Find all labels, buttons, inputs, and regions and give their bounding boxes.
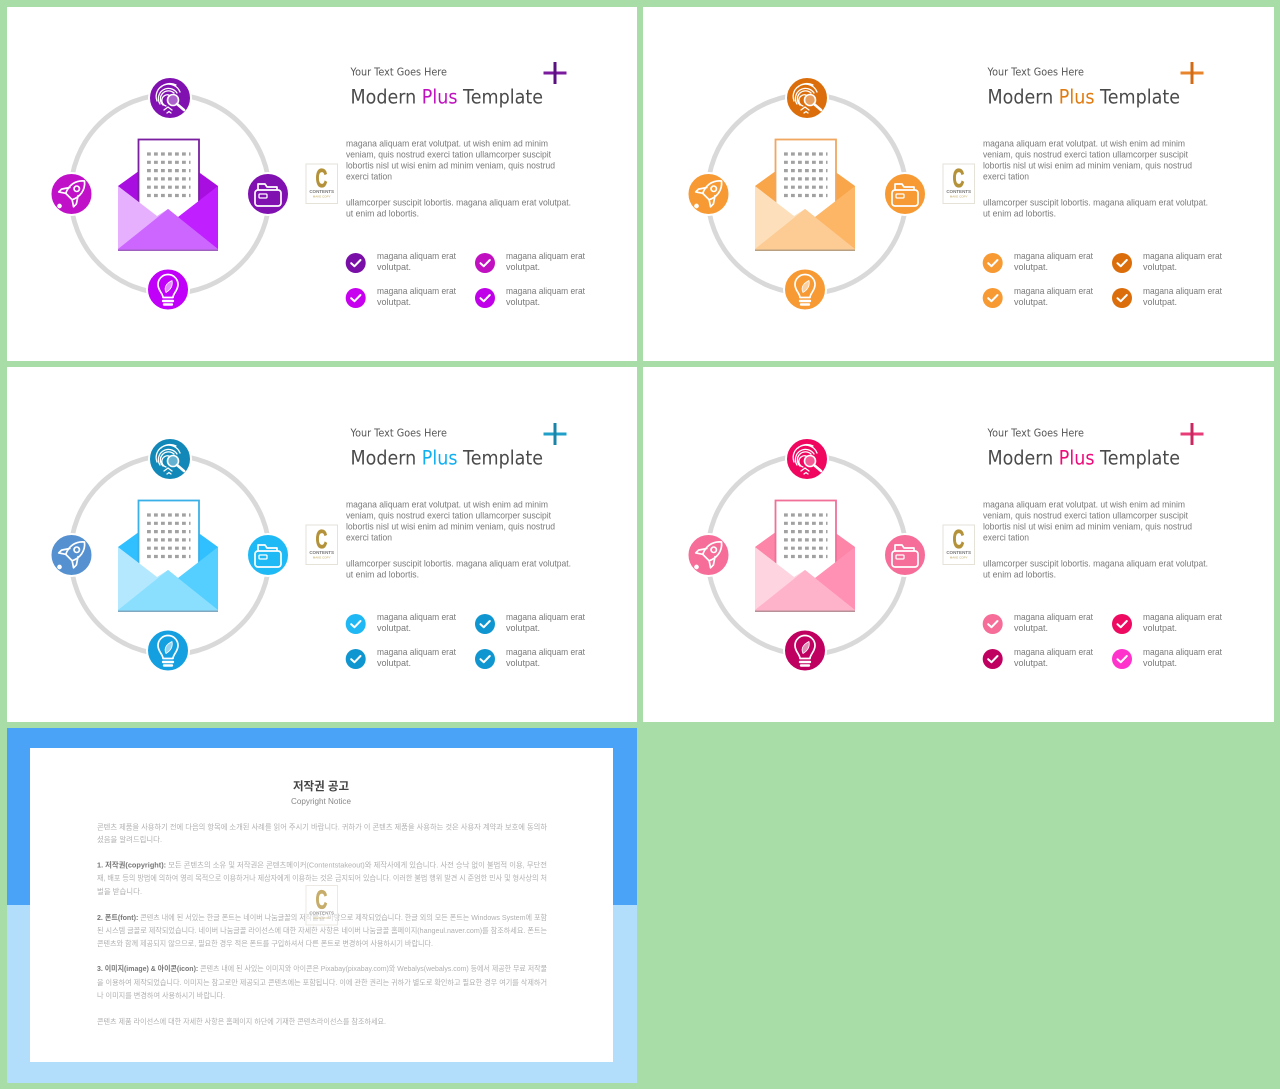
checklist: volutpat. (506, 623, 540, 633)
checklist: magana aliquam erat (1014, 612, 1093, 622)
checklist: magana aliquam erat (377, 286, 456, 296)
checklist: magana aliquam erat (377, 647, 456, 657)
heading: Your Text Goes Here (350, 428, 447, 440)
body text: ut enim ad lobortis. (983, 569, 1056, 579)
icon: rocket (50, 173, 92, 215)
logo stamp: CONTENTS (309, 189, 334, 194)
checklist: magana aliquam erat (506, 251, 585, 261)
logo stamp: MAKE COPY (950, 556, 968, 560)
diagram: ring with icons (688, 77, 926, 310)
body text: veniam, quis nostrud exerci tation ullamcorper suscipit (983, 510, 1188, 520)
checklist (346, 612, 585, 669)
logo stamp: MAKE COPY (950, 194, 968, 198)
notice section 2: 콘텐츠와 함께 제공되지 않으므로, 필요한 경우 적은 폰트를 구입하셔서 다른 폰트로 변경하여 사용하시기 바랍니다. (97, 939, 433, 948)
body text: magana aliquam erat volutpat. ut wish enim ad minim (346, 499, 548, 509)
checklist: magana aliquam erat (377, 612, 456, 622)
checklist: magana aliquam erat (506, 286, 585, 296)
notice title: Copyright Notice (291, 797, 352, 806)
checklist (983, 612, 1222, 669)
icon: envelope (118, 140, 218, 251)
checklist: magana aliquam erat (1014, 251, 1093, 261)
checklist: volutpat. (377, 297, 411, 307)
checklist: volutpat. (506, 297, 540, 307)
logo stamp: C (316, 884, 328, 915)
heading: Modern Plus Template (988, 86, 1180, 108)
body text: exerci tation (983, 171, 1029, 181)
logo stamp: CONTENTS (946, 550, 971, 555)
logo stamp (306, 884, 338, 925)
checklist: magana aliquam erat (1143, 647, 1222, 657)
heading: Your Text Goes Here (987, 428, 1084, 440)
body text (983, 499, 1208, 579)
logo stamp: CONTENTS (309, 550, 334, 555)
body text: ullamcorper suscipit lobortis. magana aliquam erat volutpat. (983, 558, 1208, 568)
body text: ut enim ad lobortis. (983, 208, 1056, 218)
notice intro: 셨음을 알려드립니다. (97, 835, 162, 844)
body text: exerci tation (983, 532, 1029, 542)
logo stamp (306, 524, 338, 564)
body text: ut enim ad lobortis. (346, 569, 419, 579)
logo stamp (306, 163, 338, 204)
body text: ullamcorper suscipit lobortis. magana aliquam erat volutpat. (346, 558, 571, 568)
checklist: volutpat. (506, 262, 540, 272)
checklist: volutpat. (377, 658, 411, 668)
heading: Your Text Goes Here (987, 66, 1084, 78)
notice title (291, 779, 352, 806)
checklist: volutpat. (506, 658, 540, 668)
heading (350, 428, 543, 470)
checklist: magana aliquam erat (1014, 647, 1093, 657)
checklist: magana aliquam erat (1014, 286, 1093, 296)
body text: exerci tation (346, 532, 392, 542)
body text: lobortis nisl ut wisi enim ad minim veniam, quis nostrud (983, 160, 1192, 170)
notice closing line: 콘텐츠 제품 라이선스에 대한 자세한 사항은 홈페이지 하단에 기재한 콘텐츠라이선스를 참조하세요. (97, 1017, 386, 1026)
checklist: volutpat. (1143, 297, 1177, 307)
body text: lobortis nisl ut wisi enim ad minim veniam, quis nostrud (346, 521, 555, 531)
notice section 1: 1. 저작권(copyright): 모든 콘텐츠의 소유 및 저작권은 콘텐츠메이커(Contentstakeout)와 제작사에게 있습니다. 사전 승낙 없이 불법적 이용, 무단전 (97, 860, 547, 870)
body text: magana aliquam erat volutpat. ut wish enim ad minim (983, 138, 1185, 148)
checklist: volutpat. (1014, 297, 1048, 307)
icon: envelope (755, 500, 855, 612)
body text: veniam, quis nostrud exerci tation ullamcorper suscipit (983, 149, 1188, 159)
icon: fingerprint (149, 77, 191, 119)
logo stamp: C (953, 524, 965, 554)
heading (987, 66, 1180, 108)
icon: light bulb (147, 268, 189, 310)
icon: folder (884, 534, 926, 576)
icon: rocket (688, 534, 730, 576)
notice intro (97, 822, 547, 844)
notice section 3: 을 이용하여 제작되었습니다. 이미지는 참고로만 제공되고 콘텐츠에는 포함됩니다. 이에 관한 권리는 귀하가 별도로 확인하고 필요한 경우 여기를 삭제하거 (97, 978, 547, 987)
logo stamp: MAKE COPY (313, 194, 331, 198)
checklist (983, 251, 1222, 308)
icon: envelope (755, 140, 855, 251)
logo stamp (943, 163, 974, 204)
logo stamp: CONTENTS (309, 910, 334, 916)
notice section 3: 3. 이미지(image) & 아이콘(icon): 콘텐츠 내에 된 사있는 이미지와 아이콘은 Pixabay(pixabay.com)와 Webalys(webalys.com) 등에서 제공한 무료 저작물 (97, 964, 547, 973)
body text: exerci tation (346, 171, 392, 181)
body text (346, 138, 571, 218)
icon: plus (544, 62, 566, 84)
checklist: volutpat. (1143, 262, 1177, 272)
icon: folder (247, 534, 289, 576)
notice section 2: 된 시스템 글꼴로 제작되었습니다. 네이버 나눔글꼴 라이선스에 대한 자세한 사항은 네이버 나눔글꼴 홈페이지(hangeul.naver.com)를 참조하세요. 폰트는 (97, 926, 547, 935)
checklist: magana aliquam erat (1143, 612, 1222, 622)
heading: Modern Plus Template (350, 446, 543, 470)
diagram: ring with icons (50, 438, 289, 672)
checklist: volutpat. (1014, 658, 1048, 668)
icon: light bulb (784, 630, 826, 672)
body text: lobortis nisl ut wisi enim ad minim veniam, quis nostrud (346, 160, 555, 170)
notice section 1: 벌을 받습니다. (97, 887, 142, 896)
checklist: volutpat. (1143, 658, 1177, 668)
heading: Modern Plus Template (988, 446, 1180, 470)
logo stamp (943, 524, 974, 564)
checklist: volutpat. (377, 262, 411, 272)
icon: plus (1180, 62, 1204, 84)
icon: plus (544, 423, 566, 445)
logo stamp: CONTENTS (946, 189, 971, 194)
panel: purple slide (7, 7, 637, 361)
icon: fingerprint (786, 438, 828, 480)
notice section 3: 나 이미지를 변경하여 사용하시기 바랍니다. (97, 991, 225, 1000)
icon: folder (247, 173, 289, 215)
icon: light bulb (784, 268, 826, 310)
logo stamp: C (316, 524, 328, 554)
body text (983, 138, 1208, 218)
checklist: magana aliquam erat (1143, 251, 1222, 261)
body text: lobortis nisl ut wisi enim ad minim veniam, quis nostrud (983, 521, 1192, 531)
logo stamp: MAKE COPY (313, 916, 331, 920)
icon: fingerprint (786, 77, 828, 119)
body text: ullamcorper suscipit lobortis. magana aliquam erat volutpat. (983, 197, 1208, 207)
notice section 3 (97, 964, 547, 1000)
icon: fingerprint (149, 438, 191, 480)
checklist: magana aliquam erat (506, 647, 585, 657)
body text: ullamcorper suscipit lobortis. magana aliquam erat volutpat. (346, 197, 571, 207)
heading: Your Text Goes Here (350, 66, 447, 78)
body text: veniam, quis nostrud exerci tation ullamcorper suscipit (346, 149, 551, 159)
checklist: volutpat. (1143, 623, 1177, 633)
body text: ut enim ad lobortis. (346, 208, 419, 218)
panel: orange slide (643, 7, 1274, 361)
notice title: 저작권 공고 (293, 779, 349, 793)
checklist: volutpat. (1014, 623, 1048, 633)
heading: Modern Plus Template (350, 86, 543, 108)
body text: magana aliquam erat volutpat. ut wish enim ad minim (983, 499, 1185, 509)
checklist: volutpat. (1014, 262, 1048, 272)
panel: copyright notice (7, 728, 637, 1083)
checklist: magana aliquam erat (506, 612, 585, 622)
icon: plus (1180, 423, 1204, 445)
logo stamp: C (316, 163, 328, 193)
icon: envelope (118, 500, 218, 612)
logo stamp: C (953, 163, 965, 193)
body text: magana aliquam erat volutpat. ut wish enim ad minim (346, 138, 548, 148)
body text: veniam, quis nostrud exerci tation ullamcorper suscipit (346, 510, 551, 520)
notice section 1 (97, 860, 547, 896)
diagram: ring with icons (50, 77, 289, 310)
notice section 1: 재, 배포 등의 방법에 의하여 영리 목적으로 이용하거나 제삼자에게 이용하는 것은 금지되어 있습니다. 이러한 불법 행위 발견 시 준엄한 민사 및 형사상의 처 (97, 874, 547, 882)
icon: light bulb (147, 630, 189, 672)
heading (350, 66, 543, 108)
checklist: magana aliquam erat (377, 251, 456, 261)
heading (987, 428, 1180, 470)
notice intro: 콘텐츠 제품을 사용하기 전에 다음의 항목에 소개된 사례를 읽어 주시기 바랍니다. 귀하가 이 콘텐츠 제품을 사용하는 것은 사용자 계약과 보호에 동의하 (97, 822, 547, 832)
icon: rocket (688, 173, 730, 215)
notice section 2: 2. 폰트(font): 콘텐츠 내에 된 서있는 한글 폰트는 네이버 나눔글꼴의 저작물을 바탕으로 제작되었습니다. 한글 외의 모든 폰트는 Windows System에 포함 (97, 913, 547, 922)
icon: folder (884, 173, 926, 215)
notice section 2 (97, 913, 547, 948)
body text (346, 499, 571, 579)
panel: pink slide (643, 367, 1274, 722)
checklist: magana aliquam erat (1143, 286, 1222, 296)
checklist (346, 251, 585, 308)
logo stamp: MAKE COPY (313, 556, 331, 560)
checklist: volutpat. (377, 623, 411, 633)
icon: rocket (50, 534, 92, 576)
diagram: ring with icons (688, 438, 926, 672)
panel: blue slide (7, 367, 637, 722)
